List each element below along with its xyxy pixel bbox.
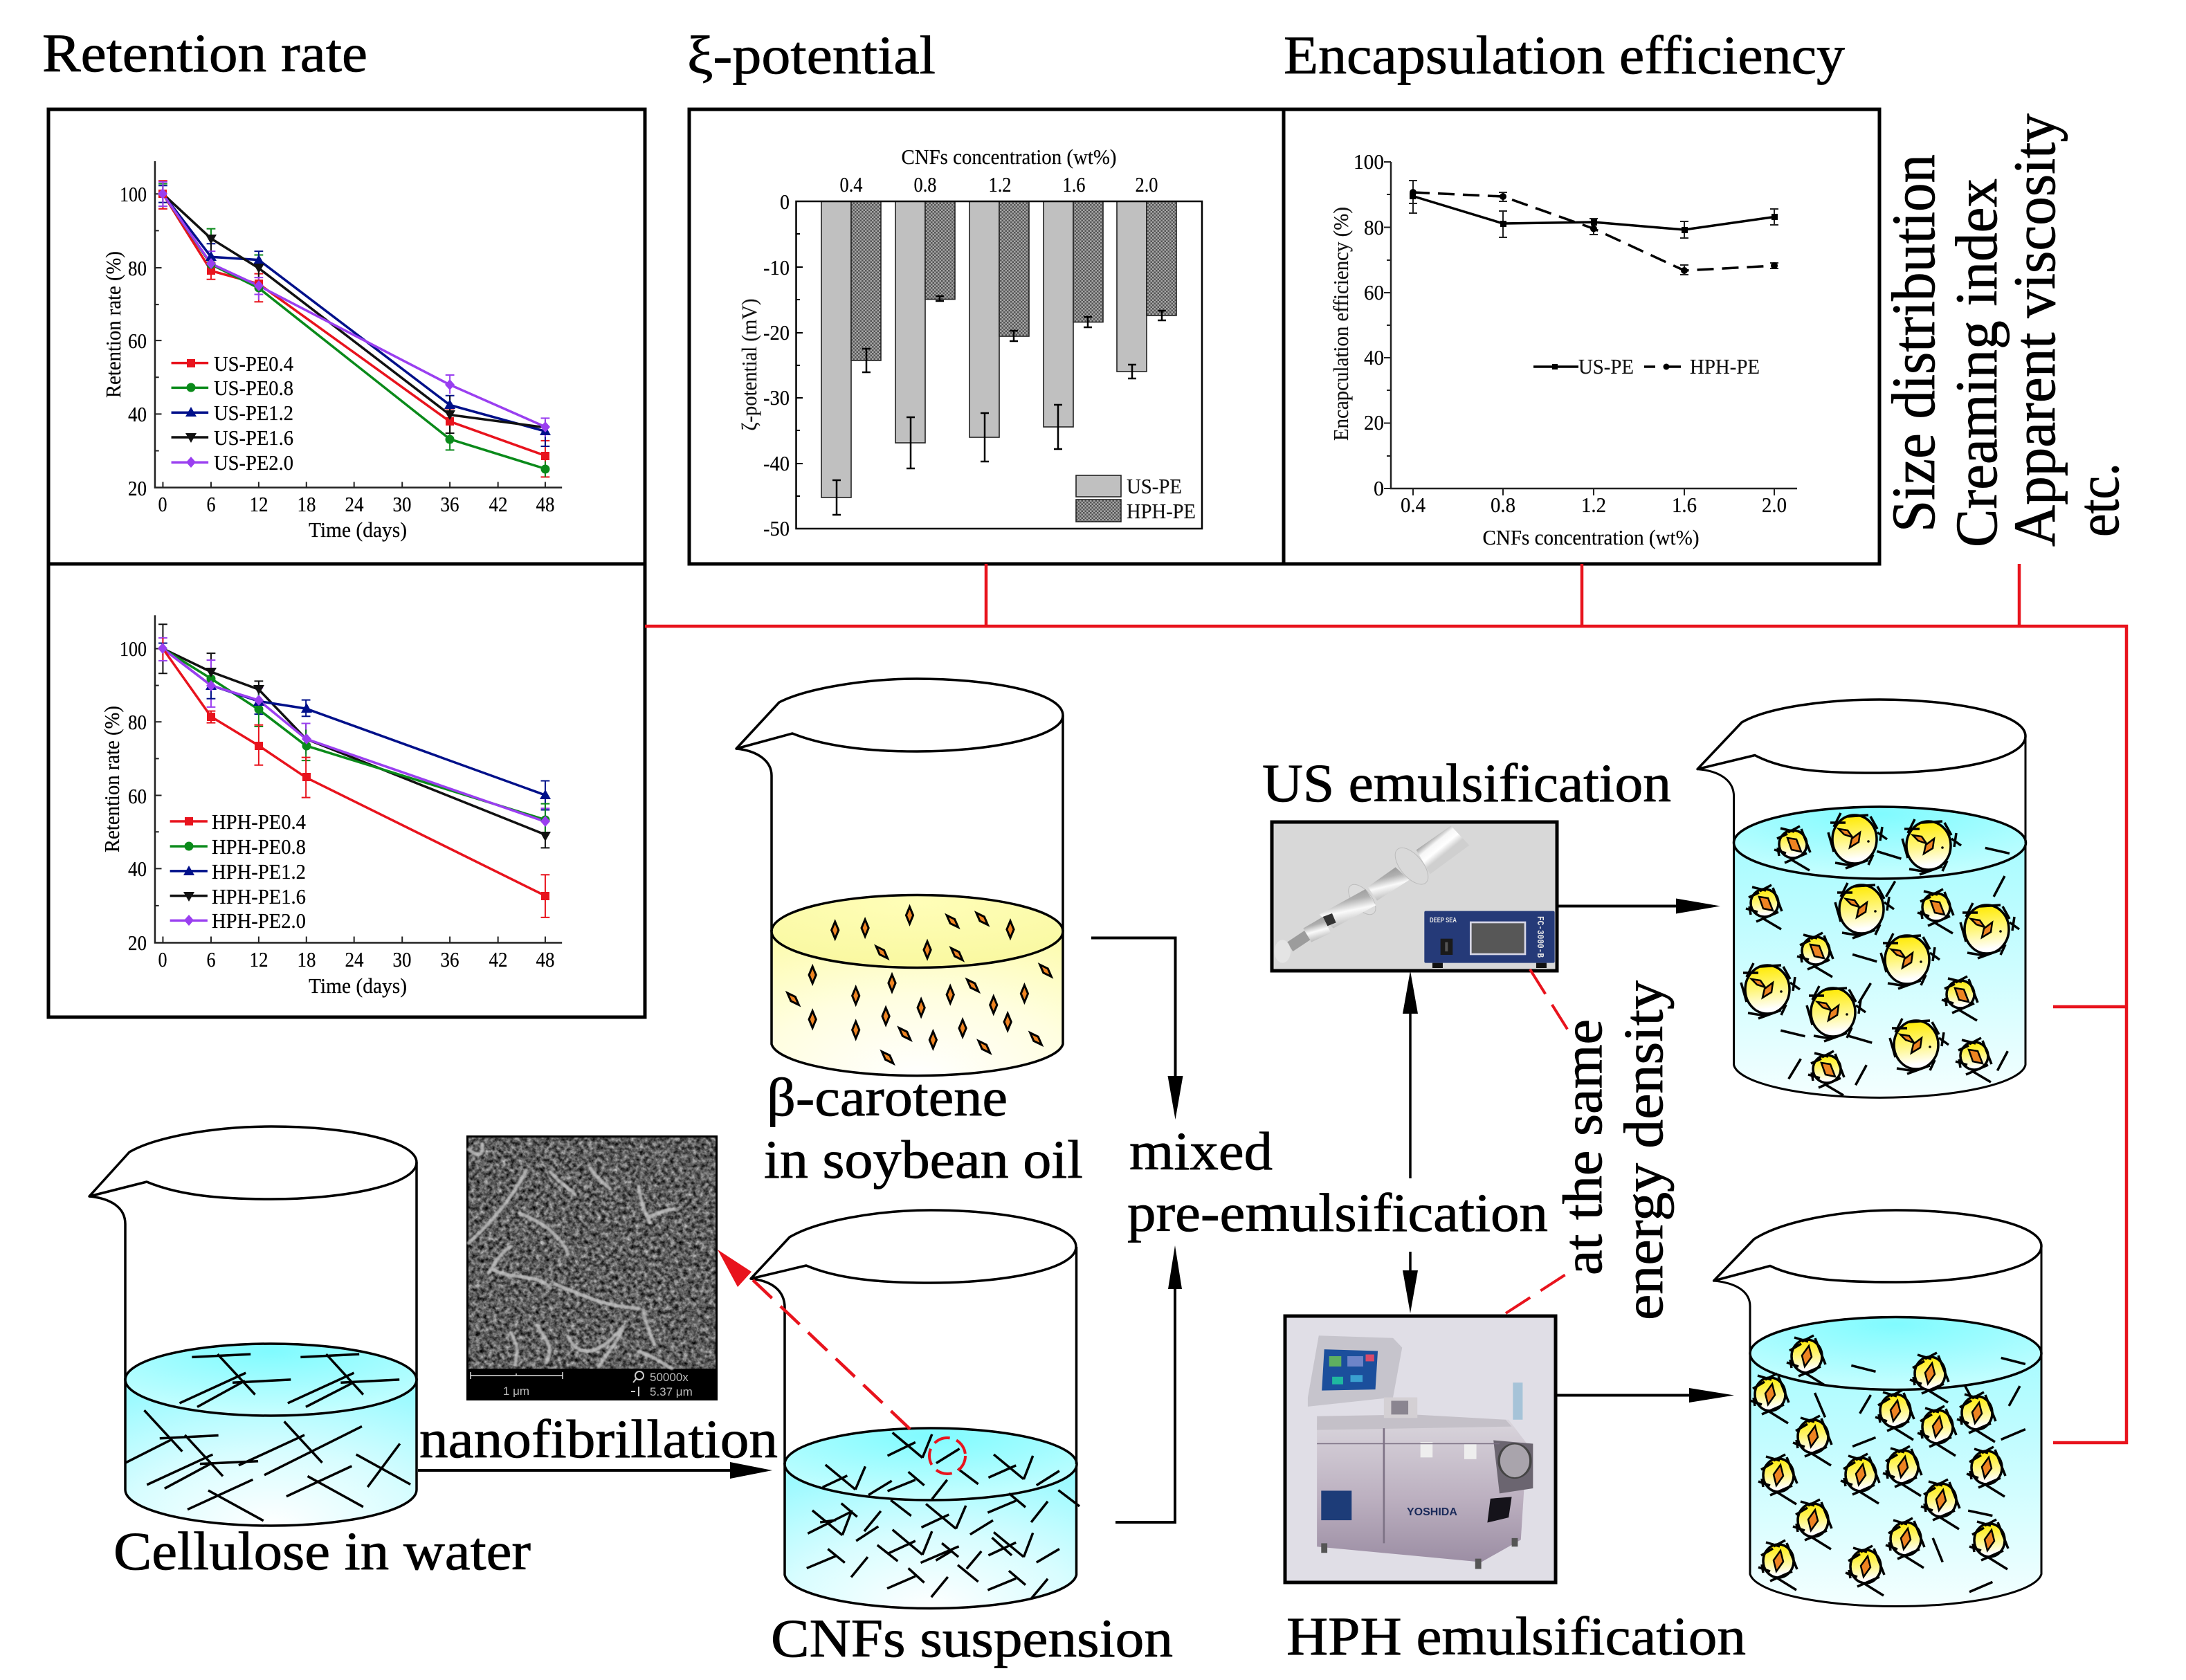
chart: encapsulation efficiency: CNFs concentration (wt%) bbox=[1482, 525, 1700, 549]
arrow: red feedback connector bbox=[645, 564, 2126, 1443]
label: nanofibrillation: nanofibrillation bbox=[419, 1409, 778, 1469]
chart: HPH-PE retention rate: HPH-PE1.6 bbox=[212, 884, 306, 909]
chart: encapsulation efficiency: 0.8 bbox=[1491, 493, 1515, 517]
text block: other properties (vertical): Creaming index bbox=[1943, 179, 2010, 547]
chart: HPH-PE retention rate: 48 bbox=[536, 947, 555, 971]
chart: HPH-PE retention rate: Time (days) bbox=[309, 974, 407, 998]
chart: zeta potential bars: CNFs concentration (wt%) bbox=[901, 145, 1117, 169]
arrow: HPH device to beaker bbox=[1556, 1388, 1734, 1403]
label: mixed pre-emulsification: mixed bbox=[1129, 1121, 1273, 1181]
chart: US-PE retention rate: US-PE2.0 bbox=[214, 450, 293, 475]
chart: zeta potential bars: -40 bbox=[763, 451, 790, 475]
beaker: cellulose in water bbox=[89, 1126, 417, 1526]
chart: HPH-PE retention rate: 6 bbox=[206, 947, 216, 971]
chart: encapsulation efficiency: 1.2 bbox=[1581, 493, 1606, 517]
chart: zeta potential bars: HPH-PE bbox=[1127, 499, 1196, 523]
chart: US-PE retention rate: 36 bbox=[440, 492, 459, 516]
chart: US-PE retention rate: US-PE0.8 bbox=[214, 376, 293, 400]
arrow: nanofibrillation bbox=[418, 1462, 772, 1479]
chart: US-PE retention rate: 60 bbox=[128, 329, 147, 353]
chart: encapsulation efficiency: 0 bbox=[1374, 476, 1384, 500]
heading: encapsulation efficiency: Encapsulation efficiency bbox=[1284, 25, 1845, 85]
text block: other properties (vertical): Apparent viscosity bbox=[2001, 113, 2068, 547]
chart: zeta potential bars: ζ-potential (mV) bbox=[737, 299, 761, 430]
arrow: oil to mixed bbox=[1091, 938, 1183, 1120]
chart: zeta potential bars: 1.2 bbox=[988, 172, 1012, 197]
chart: HPH-PE retention rate: 24 bbox=[345, 947, 364, 971]
chart: HPH-PE retention rate: HPH-PE2.0 bbox=[212, 909, 306, 933]
chart: US-PE retention rate: 42 bbox=[489, 492, 508, 516]
cellulose fibers bbox=[126, 1354, 410, 1521]
chart: US-PE retention rate: US-PE1.6 bbox=[214, 426, 293, 450]
chart: HPH-PE retention rate: 18 bbox=[298, 947, 316, 971]
label: mixed pre-emulsification bbox=[1127, 1121, 1548, 1243]
chart: zeta potential bars: -50 bbox=[763, 516, 790, 540]
chart: US-PE retention rate: 48 bbox=[536, 492, 555, 516]
large droplets bbox=[1741, 813, 2019, 1074]
chart: HPH-PE retention rate: HPH-PE0.8 bbox=[212, 834, 306, 859]
beaker: HPH emulsion bbox=[1714, 1210, 2041, 1607]
chart: encapsulation efficiency: US-PE bbox=[1578, 354, 1634, 378]
chart: US-PE retention rate: 0 bbox=[158, 492, 167, 516]
chart: US-PE retention rate: 100 bbox=[120, 182, 147, 206]
chart: encapsulation efficiency: 2.0 bbox=[1762, 493, 1787, 517]
label: at the same energy density: energy density bbox=[1614, 980, 1675, 1320]
chart: HPH-PE retention rate: 80 bbox=[128, 710, 147, 734]
chart: US-PE retention rate: 24 bbox=[345, 492, 364, 516]
photo: SEM image of nanofibers: 5.37 μm bbox=[650, 1385, 693, 1398]
chart: encapsulation efficiency: 0.4 bbox=[1401, 493, 1426, 517]
chart: US-PE retention rate: 20 bbox=[128, 476, 147, 500]
photo: SEM image of nanofibers: 50000x bbox=[650, 1371, 689, 1384]
chart: zeta potential bars: 0.4 bbox=[840, 172, 863, 197]
beaker: CNFs suspension bbox=[751, 1210, 1080, 1609]
heading: zeta potential: ξ-potential bbox=[687, 25, 936, 85]
chart: US-PE retention rate: Retention rate (%) bbox=[101, 251, 125, 398]
photo: ultrasonic device: FC-3000-B bbox=[1534, 916, 1545, 958]
chart: zeta potential bars: -30 bbox=[763, 385, 790, 410]
photo: high pressure homogenizer bbox=[1285, 1316, 1556, 1582]
chart: HPH-PE retention rate: 12 bbox=[249, 947, 268, 971]
loose fibers bbox=[1815, 1358, 2025, 1592]
arrow: mixture up to US device bbox=[1403, 971, 1418, 1178]
chart: encapsulation efficiency: Encapculation efficiency (%) bbox=[1329, 207, 1353, 441]
nanofibers bbox=[807, 1433, 1080, 1599]
photo: SEM image of nanofibers bbox=[466, 1135, 718, 1400]
chart: US-PE retention rate: US-PE0.4 bbox=[214, 351, 293, 376]
photo: SEM image of nanofibers: 1 μm bbox=[503, 1385, 529, 1398]
chart: US-PE retention rate: 30 bbox=[393, 492, 411, 516]
connector: red dashed, at the same energy density bbox=[1506, 969, 1574, 1313]
chart: encapsulation efficiency: 60 bbox=[1364, 280, 1384, 304]
label: beta-carotene in soybean oil bbox=[764, 1067, 1083, 1189]
label: at the same energy density bbox=[1553, 980, 1675, 1320]
arrow: US device to beaker bbox=[1557, 898, 1720, 913]
chart: US-PE retention rate: 6 bbox=[206, 492, 216, 516]
beta-carotene crystals bbox=[787, 907, 1051, 1063]
chart: encapsulation efficiency: 40 bbox=[1364, 345, 1384, 369]
chart: HPH-PE retention rate: 100 bbox=[120, 637, 147, 661]
chart: zeta potential bars: US-PE bbox=[1127, 474, 1182, 498]
label: HPH emulsification: HPH emulsification bbox=[1286, 1606, 1746, 1666]
label: mixed pre-emulsification: pre-emulsification bbox=[1127, 1183, 1548, 1243]
chart: HPH-PE retention rate: Retention rate (%) bbox=[100, 706, 124, 852]
photo: high pressure homogenizer: YOSHIDA bbox=[1407, 1506, 1457, 1518]
chart: zeta potential bars: 1.6 bbox=[1063, 172, 1085, 197]
text block: other properties (vertical) bbox=[1880, 113, 2131, 547]
heading: retention rate: Retention rate bbox=[42, 23, 367, 83]
chart: HPH-PE retention rate: 30 bbox=[393, 947, 411, 971]
chart: US-PE retention rate: 18 bbox=[298, 492, 316, 516]
chart: HPH-PE retention rate: 60 bbox=[128, 784, 147, 808]
arrow: red dashed zoom callout to SEM bbox=[718, 1250, 965, 1474]
chart: HPH-PE retention rate: 36 bbox=[440, 947, 459, 971]
label: at the same energy density: at the same bbox=[1553, 1019, 1614, 1275]
text block: other properties (vertical): Size distribution bbox=[1880, 154, 1948, 532]
chart: encapsulation efficiency: 1.6 bbox=[1672, 493, 1697, 517]
small droplets bbox=[1746, 826, 1992, 1095]
label: cellulose in water: Cellulose in water bbox=[113, 1521, 531, 1581]
chart: zeta potential bars bbox=[737, 145, 1202, 540]
chart: zeta potential bars: 0 bbox=[780, 190, 790, 214]
label: CNFs suspension: CNFs suspension bbox=[771, 1608, 1173, 1668]
beaker: US emulsion bbox=[1697, 700, 2026, 1097]
chart: HPH-PE retention rate: 42 bbox=[489, 947, 508, 971]
chart: zeta potential bars: -20 bbox=[763, 320, 790, 345]
chart: HPH-PE retention rate: HPH-PE1.2 bbox=[212, 859, 306, 884]
panel: retention rate charts frame bbox=[48, 109, 645, 1017]
chart: encapsulation efficiency: HPH-PE bbox=[1690, 354, 1760, 378]
chart: HPH-PE retention rate bbox=[100, 615, 562, 998]
label: beta-carotene in soybean oil: β-carotene bbox=[767, 1067, 1008, 1127]
chart: HPH-PE retention rate: 40 bbox=[128, 857, 147, 881]
chart: HPH-PE retention rate: 20 bbox=[128, 931, 147, 955]
chart: zeta potential bars: 2.0 bbox=[1135, 172, 1158, 197]
chart: encapsulation efficiency: 20 bbox=[1364, 410, 1384, 435]
chart: encapsulation efficiency bbox=[1329, 149, 1797, 549]
photo: ultrasonic device: DEEP SEA bbox=[1430, 917, 1457, 924]
chart: US-PE retention rate: 12 bbox=[249, 492, 268, 516]
loose fibers bbox=[1780, 848, 2010, 1085]
arrow: CNFs to mixed bbox=[1115, 1245, 1182, 1522]
chart: zeta potential bars: -10 bbox=[763, 255, 790, 280]
label: beta-carotene in soybean oil: in soybean oil bbox=[764, 1129, 1083, 1189]
beaker: beta-carotene in soybean oil bbox=[736, 679, 1063, 1076]
chart: US-PE retention rate: 80 bbox=[128, 256, 147, 280]
photo: ultrasonic device bbox=[1272, 822, 1557, 971]
chart: US-PE retention rate: US-PE1.2 bbox=[214, 401, 293, 425]
chart: US-PE retention rate bbox=[101, 161, 562, 542]
arrow: mixture down to HPH device bbox=[1403, 1252, 1418, 1313]
chart: HPH-PE retention rate: 0 bbox=[158, 947, 167, 971]
chart: US-PE retention rate: Time (days) bbox=[309, 518, 407, 542]
droplets bbox=[1750, 1335, 2008, 1596]
text block: other properties (vertical): etc. bbox=[2065, 463, 2131, 537]
chart: encapsulation efficiency: 80 bbox=[1364, 215, 1384, 239]
chart: HPH-PE retention rate: HPH-PE0.4 bbox=[212, 810, 306, 834]
chart: encapsulation efficiency: 100 bbox=[1354, 149, 1384, 174]
panel: zeta potential and encapsulation frame bbox=[689, 109, 1879, 564]
label: US emulsification: US emulsification bbox=[1262, 753, 1671, 813]
chart: zeta potential bars: 0.8 bbox=[913, 172, 937, 197]
chart: US-PE retention rate: 40 bbox=[128, 402, 147, 426]
